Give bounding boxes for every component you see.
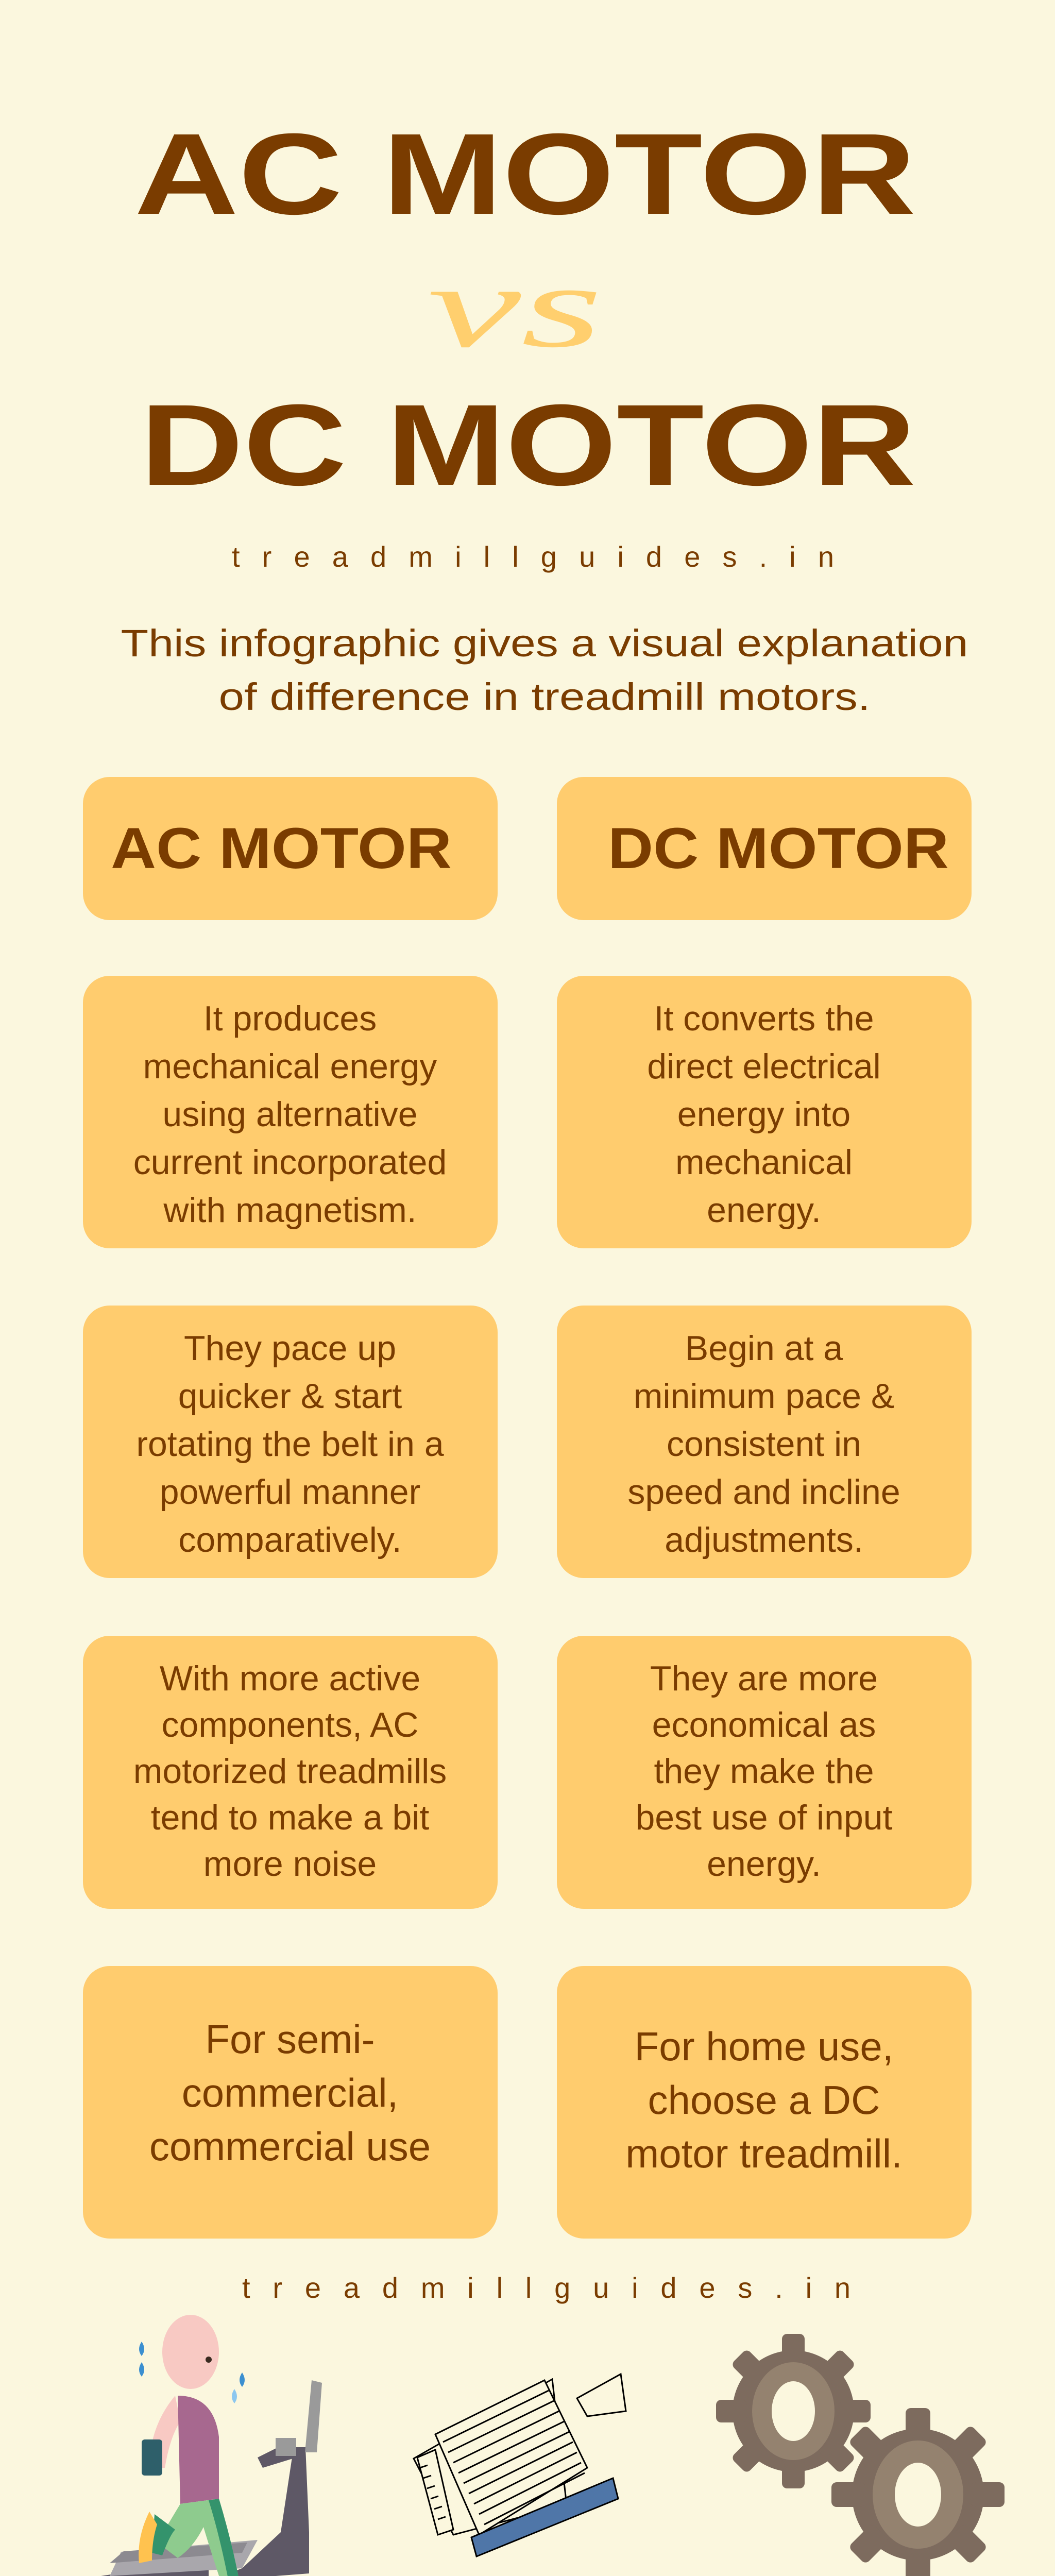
panel: DC recommendation: motor treadmill. bbox=[625, 2131, 903, 2176]
panel: DC MOTOR header bbox=[557, 777, 972, 920]
panel: DC point 2: speed and incline bbox=[627, 1472, 900, 1512]
panel: DC point 2: consistent in bbox=[667, 1425, 861, 1464]
panel: DC recommendation bbox=[557, 1966, 972, 2239]
panel: DC point 1 bbox=[557, 976, 972, 1248]
panel: AC point 3: components, AC bbox=[162, 1705, 418, 1744]
panel: AC point 2: quicker & start bbox=[178, 1377, 402, 1416]
panel: DC point 1: energy into bbox=[677, 1095, 850, 1134]
panel: DC point 1: It converts the bbox=[654, 999, 874, 1038]
panel: DC point 3: They are more bbox=[650, 1659, 878, 1698]
panel: DC point 2: adjustments. bbox=[665, 1520, 863, 1560]
subtitle text bbox=[121, 622, 968, 718]
panel: AC point 1: It produces bbox=[203, 999, 377, 1038]
panel: AC recommendation bbox=[83, 1966, 498, 2239]
panel: DC point 3 bbox=[557, 1636, 972, 1909]
panel: AC point 1: with magnetism. bbox=[163, 1191, 417, 1230]
panel: AC point 3 bbox=[83, 1636, 498, 1909]
panel: DC MOTOR header: DC MOTOR bbox=[608, 816, 949, 880]
panel: AC recommendation: commercial, bbox=[182, 2070, 398, 2115]
title: AC MOTOR: AC MOTOR bbox=[134, 110, 916, 239]
panel: DC recommendation: For home use, bbox=[635, 2024, 893, 2069]
icon: runner on treadmill bbox=[101, 2315, 322, 2576]
subtitle text: of difference in treadmill motors. bbox=[218, 675, 871, 718]
panel: DC point 3: best use of input bbox=[635, 1798, 893, 1837]
panel: DC point 2 bbox=[557, 1306, 972, 1578]
panel: DC recommendation: choose a DC bbox=[648, 2077, 880, 2123]
panel: AC point 1 bbox=[83, 976, 498, 1248]
subtitle text: This infographic gives a visual explanation bbox=[121, 622, 968, 665]
panel: AC point 2: comparatively. bbox=[178, 1520, 402, 1560]
panel: AC point 1: using alternative bbox=[162, 1095, 418, 1134]
panel: AC point 2 bbox=[83, 1306, 498, 1578]
website url bottom: treadmillguides.in bbox=[242, 2272, 850, 2304]
panel: AC point 3: motorized treadmills bbox=[133, 1752, 447, 1791]
panel: DC point 2: minimum pace & bbox=[634, 1377, 894, 1416]
panel: AC point 2: powerful manner bbox=[160, 1472, 420, 1512]
panel: DC point 1: mechanical bbox=[675, 1143, 853, 1182]
panel: AC point 3: With more active bbox=[160, 1659, 420, 1698]
panel: AC point 2: rotating the belt in a bbox=[136, 1425, 444, 1464]
panel: AC MOTOR header: AC MOTOR bbox=[111, 816, 452, 880]
panel: AC point 2: They pace up bbox=[184, 1329, 396, 1368]
panel: AC point 3: more noise bbox=[203, 1844, 377, 1884]
panel: AC point 1: current incorporated bbox=[133, 1143, 447, 1182]
panel: AC recommendation: For semi- bbox=[205, 2016, 375, 2062]
icon: gears bbox=[716, 2334, 1005, 2576]
panel: AC recommendation: commercial use bbox=[149, 2124, 431, 2169]
panel: DC point 1: energy. bbox=[707, 1191, 821, 1230]
panel: DC point 3: energy. bbox=[707, 1844, 821, 1884]
panel: DC point 1: direct electrical bbox=[647, 1047, 881, 1086]
panel: AC point 3: tend to make a bit bbox=[151, 1798, 429, 1837]
icon: electric motor bbox=[414, 2374, 626, 2556]
website url top: treadmillguides.in bbox=[232, 540, 834, 573]
panel: DC point 3: economical as bbox=[652, 1705, 876, 1744]
panel: DC point 3: they make the bbox=[654, 1752, 874, 1791]
title: DC MOTOR: DC MOTOR bbox=[140, 381, 916, 510]
panel: DC point 2: Begin at a bbox=[685, 1329, 843, 1368]
panel: AC MOTOR header bbox=[83, 777, 498, 920]
panel: AC point 1: mechanical energy bbox=[143, 1047, 437, 1086]
title: VS script: vs bbox=[428, 241, 603, 372]
